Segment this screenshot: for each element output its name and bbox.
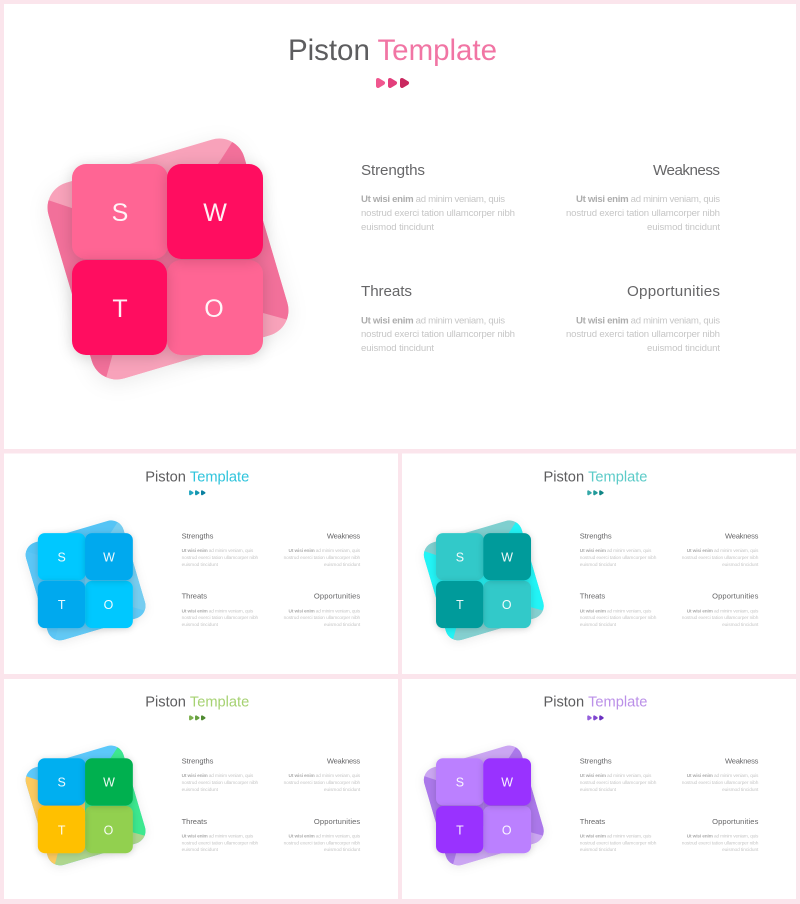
tile W: W — [501, 776, 513, 790]
block: opportunities: euismod tincidunt — [324, 847, 361, 853]
block: opportunities: euismod tincidunt — [722, 622, 759, 628]
block: weakness: euismod tincidunt — [324, 562, 361, 568]
panel: multicolour slide — [4, 679, 398, 899]
block: threats: Ut wisi enim ad minim veniam, quis — [182, 608, 254, 614]
panel: pink main slide — [4, 4, 796, 449]
title: Piston Template — [543, 694, 647, 710]
SWOT graphic — [424, 746, 544, 868]
block: threats: Ut wisi enim ad minim veniam, quis — [361, 316, 505, 326]
block: opportunities: euismod tincidunt — [324, 622, 361, 628]
title: Piston Template — [145, 694, 249, 710]
block: strengths: Ut wisi enim ad minim veniam, quis — [182, 773, 254, 779]
tile O: O — [104, 598, 114, 612]
block: threats — [361, 283, 515, 354]
block: opportunities: nostrud exerci tation ullamcorper nibh — [682, 840, 759, 846]
block: opportunities — [566, 283, 720, 354]
block: strengths: nostrud exerci tation ullamcorper nibh — [182, 555, 259, 561]
block: weakness — [284, 532, 361, 568]
block: strengths: nostrud exerci tation ullamcorper nibh — [361, 208, 515, 219]
title: Piston Template — [288, 34, 497, 67]
tile W: W — [103, 550, 115, 564]
block: strengths: Strengths — [361, 162, 425, 179]
tile O: O — [204, 295, 224, 323]
block: weakness: Weakness — [653, 162, 720, 179]
SWOT graphic — [26, 746, 146, 868]
tile O — [167, 260, 263, 355]
block: weakness: Weakness — [327, 757, 360, 766]
tile S: S — [456, 776, 464, 790]
block: strengths: nostrud exerci tation ullamcorper nibh — [580, 780, 657, 786]
block: opportunities: nostrud exerci tation ullamcorper nibh — [284, 615, 361, 621]
block: threats: Threats — [182, 592, 207, 601]
block: threats: euismod tincidunt — [361, 343, 434, 354]
block: threats: Ut wisi enim ad minim veniam, quis — [182, 834, 254, 840]
title: Piston Template — [145, 469, 249, 485]
block: weakness — [682, 757, 759, 793]
block: strengths: Ut wisi enim ad minim veniam, quis — [182, 548, 254, 554]
tile O: O — [502, 598, 512, 612]
block: weakness: euismod tincidunt — [722, 787, 759, 793]
block: opportunities: Ut wisi enim ad minim veniam, quis — [289, 834, 361, 840]
block: strengths: Strengths — [182, 757, 214, 766]
block: weakness: nostrud exerci tation ullamcorper nibh — [682, 780, 759, 786]
block: threats: Threats — [361, 283, 412, 300]
block: opportunities: euismod tincidunt — [722, 847, 759, 853]
block: opportunities: nostrud exerci tation ullamcorper nibh — [284, 840, 361, 846]
block: weakness — [566, 162, 720, 233]
block: weakness: Weakness — [725, 757, 759, 766]
block: threats: euismod tincidunt — [182, 622, 219, 628]
block: strengths: Ut wisi enim ad minim veniam, quis — [361, 194, 505, 205]
block: opportunities: euismod tincidunt — [647, 343, 720, 354]
block: strengths: Ut wisi enim ad minim veniam, quis — [580, 548, 652, 554]
block: opportunities: Ut wisi enim ad minim veniam, quis — [687, 608, 759, 614]
tile T: T — [58, 823, 66, 837]
tile S — [72, 164, 168, 259]
tile T: T — [112, 295, 128, 323]
block: threats: Ut wisi enim ad minim veniam, quis — [580, 834, 652, 840]
block: weakness: Ut wisi enim ad minim veniam, quis — [687, 773, 759, 779]
block: threats — [580, 817, 657, 853]
block: weakness: nostrud exerci tation ullamcorper nibh — [566, 208, 720, 219]
block: opportunities: Opportunities — [712, 592, 759, 601]
block: threats: nostrud exerci tation ullamcorper nibh — [580, 840, 657, 846]
icon: three arrows — [588, 491, 603, 494]
SWOT graphic — [26, 520, 146, 642]
block: weakness: nostrud exerci tation ullamcorper nibh — [284, 555, 361, 561]
block: opportunities: nostrud exerci tation ullamcorper nibh — [682, 615, 759, 621]
block: opportunities — [682, 592, 759, 628]
block: strengths — [182, 532, 259, 568]
block: opportunities: Ut wisi enim ad minim veniam, quis — [289, 608, 361, 614]
block: strengths — [182, 757, 259, 793]
tile S: S — [58, 550, 66, 564]
block: threats: Ut wisi enim ad minim veniam, quis — [580, 608, 652, 614]
block: strengths: euismod tincidunt — [182, 562, 219, 568]
block: opportunities — [284, 592, 361, 628]
block: weakness: Weakness — [725, 532, 759, 541]
block: strengths: euismod tincidunt — [182, 787, 219, 793]
block: opportunities: Opportunities — [627, 283, 720, 300]
panel: teal slide — [402, 454, 796, 674]
tile T — [72, 260, 167, 355]
block: weakness: Ut wisi enim ad minim veniam, quis — [576, 194, 720, 205]
tile S: S — [112, 199, 128, 227]
block: weakness: nostrud exerci tation ullamcorper nibh — [284, 780, 361, 786]
tile W — [167, 164, 263, 259]
tile S: S — [58, 776, 66, 790]
block: threats: euismod tincidunt — [580, 622, 617, 628]
block: opportunities — [682, 817, 759, 853]
icon: three arrows — [190, 491, 204, 494]
block: threats: nostrud exerci tation ullamcorper nibh — [182, 840, 259, 846]
tile T: T — [456, 598, 464, 612]
block: strengths — [580, 757, 657, 793]
block: opportunities: Opportunities — [314, 592, 360, 601]
icon: three arrows — [378, 80, 407, 86]
tile O: O — [104, 823, 114, 837]
block: threats — [182, 592, 259, 628]
block: weakness: nostrud exerci tation ullamcorper nibh — [682, 555, 759, 561]
block: opportunities: Opportunities — [314, 817, 360, 826]
block: strengths: nostrud exerci tation ullamcorper nibh — [580, 555, 657, 561]
block: weakness: Ut wisi enim ad minim veniam, quis — [289, 548, 361, 554]
tile S: S — [456, 550, 464, 564]
block: threats — [182, 817, 259, 853]
block: threats: nostrud exerci tation ullamcorper nibh — [182, 615, 259, 621]
SWOT graphic — [47, 138, 289, 384]
block: threats — [580, 592, 657, 628]
title: Piston Template — [543, 469, 647, 485]
tile O: O — [502, 823, 512, 837]
block: weakness: Ut wisi enim ad minim veniam, quis — [687, 548, 759, 554]
block: opportunities: Ut wisi enim ad minim veniam, quis — [687, 834, 759, 840]
block: threats: Threats — [182, 817, 207, 826]
block: opportunities — [284, 817, 361, 853]
tile W: W — [103, 776, 115, 790]
tile T: T — [58, 598, 66, 612]
block: weakness: euismod tincidunt — [324, 787, 361, 793]
block: strengths: euismod tincidunt — [580, 562, 617, 568]
block: opportunities: nostrud exerci tation ullamcorper nibh — [566, 329, 720, 340]
tile T: T — [456, 823, 464, 837]
block: weakness — [682, 532, 759, 568]
block: strengths: nostrud exerci tation ullamcorper nibh — [182, 780, 259, 786]
block: weakness: euismod tincidunt — [647, 222, 720, 233]
block: weakness: Weakness — [327, 532, 360, 541]
block: opportunities: Opportunities — [712, 817, 759, 826]
block: threats: euismod tincidunt — [182, 847, 219, 853]
panel: purple slide — [402, 679, 796, 899]
icon: three arrows — [588, 716, 603, 719]
block: threats: Threats — [580, 592, 605, 601]
tile W: W — [203, 199, 227, 227]
tile W: W — [501, 550, 513, 564]
block: strengths — [580, 532, 657, 568]
block: strengths: Strengths — [580, 532, 612, 541]
block: opportunities: Ut wisi enim ad minim veniam, quis — [576, 316, 720, 326]
block: strengths: euismod tincidunt — [580, 787, 617, 793]
block: weakness — [284, 757, 361, 793]
block: strengths: Ut wisi enim ad minim veniam, quis — [580, 773, 652, 779]
block: weakness: euismod tincidunt — [722, 562, 759, 568]
panel: blue slide — [4, 454, 398, 674]
block: strengths: Strengths — [580, 757, 612, 766]
block: weakness: Ut wisi enim ad minim veniam, quis — [289, 773, 361, 779]
SWOT graphic — [424, 520, 544, 642]
block: strengths: euismod tincidunt — [361, 222, 434, 233]
block: threats: euismod tincidunt — [580, 847, 617, 853]
block: threats: nostrud exerci tation ullamcorper nibh — [361, 329, 515, 340]
block: strengths: Strengths — [182, 532, 214, 541]
block: strengths — [361, 162, 515, 233]
icon: three arrows — [190, 716, 204, 719]
block: threats: Threats — [580, 817, 605, 826]
block: threats: nostrud exerci tation ullamcorper nibh — [580, 615, 657, 621]
